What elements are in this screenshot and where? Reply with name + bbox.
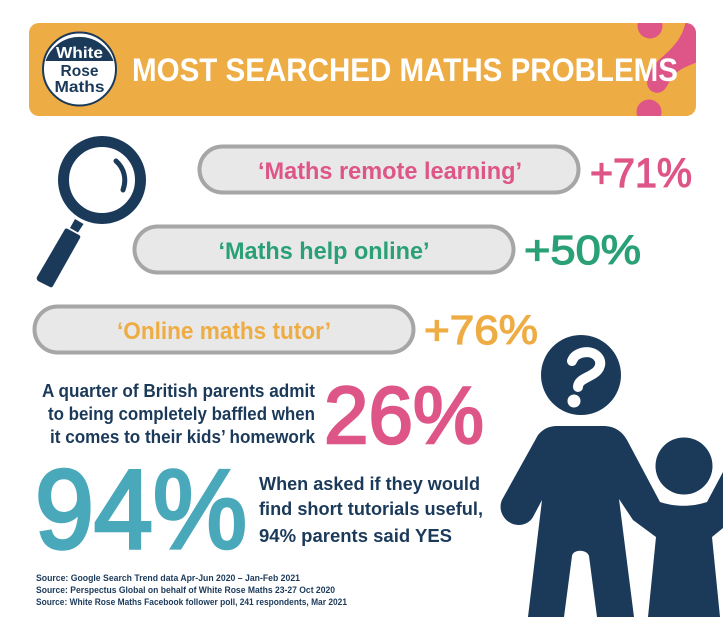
search pill: Maths help online — [134, 226, 514, 272]
stat: +50%: +50% — [524, 227, 641, 273]
text: short tutorials: 94% parents said YES — [259, 526, 452, 546]
text: short tutorials: find short tutorials useful, — [259, 499, 483, 519]
adult body with arm reaching child — [501, 426, 723, 617]
text: a quarter of British parents — [42, 381, 316, 447]
text: a quarter of British parents: it comes to their kids’ homework — [50, 427, 316, 447]
sources: Source: White Rose Maths Facebook follower poll, 241 respondents, Mar 2021 — [36, 597, 347, 607]
question mark in head — [568, 352, 600, 408]
stat: +71%: +71% — [590, 150, 692, 196]
text: short tutorials — [259, 474, 483, 546]
search pill: Maths remote learning — [200, 146, 578, 192]
logo: Maths — [54, 79, 104, 96]
stat: 94%: 94% — [35, 447, 247, 572]
adult head — [541, 335, 621, 415]
header banner — [29, 23, 696, 116]
child head — [656, 438, 712, 494]
icon: pink question mark — [636, 23, 696, 116]
icon: adult and child figures — [501, 335, 723, 617]
sources — [36, 573, 347, 607]
title: MOST SEARCHED MATHS PROBLEMS — [132, 52, 678, 88]
stat: +76%: +76% — [424, 307, 538, 353]
logo — [43, 32, 116, 106]
search pill: Online maths tutor: ‘Online maths tutor’ — [117, 318, 331, 345]
search pill: Online maths tutor — [34, 306, 414, 352]
text: a quarter of British parents: to being completely baffled when — [48, 404, 315, 424]
text: short tutorials: When asked if they would — [259, 474, 480, 494]
stat: 26%: 26% — [324, 371, 484, 461]
search pill: Maths remote learning: ‘Maths remote learning’ — [258, 158, 522, 185]
logo: Rose — [60, 63, 99, 80]
text: a quarter of British parents: A quarter of British parents admit — [42, 381, 315, 401]
icon: magnifying glass — [37, 142, 140, 287]
sources: Source: Perspectus Global on behalf of White Rose Maths 23-27 Oct 2020 — [36, 585, 335, 595]
sources: Source: Google Search Trend data Apr-Jun 2020 – Jan-Feb 2021 — [36, 573, 300, 583]
search pill: Maths help online: ‘Maths help online’ — [218, 238, 430, 265]
logo: White — [56, 45, 103, 62]
